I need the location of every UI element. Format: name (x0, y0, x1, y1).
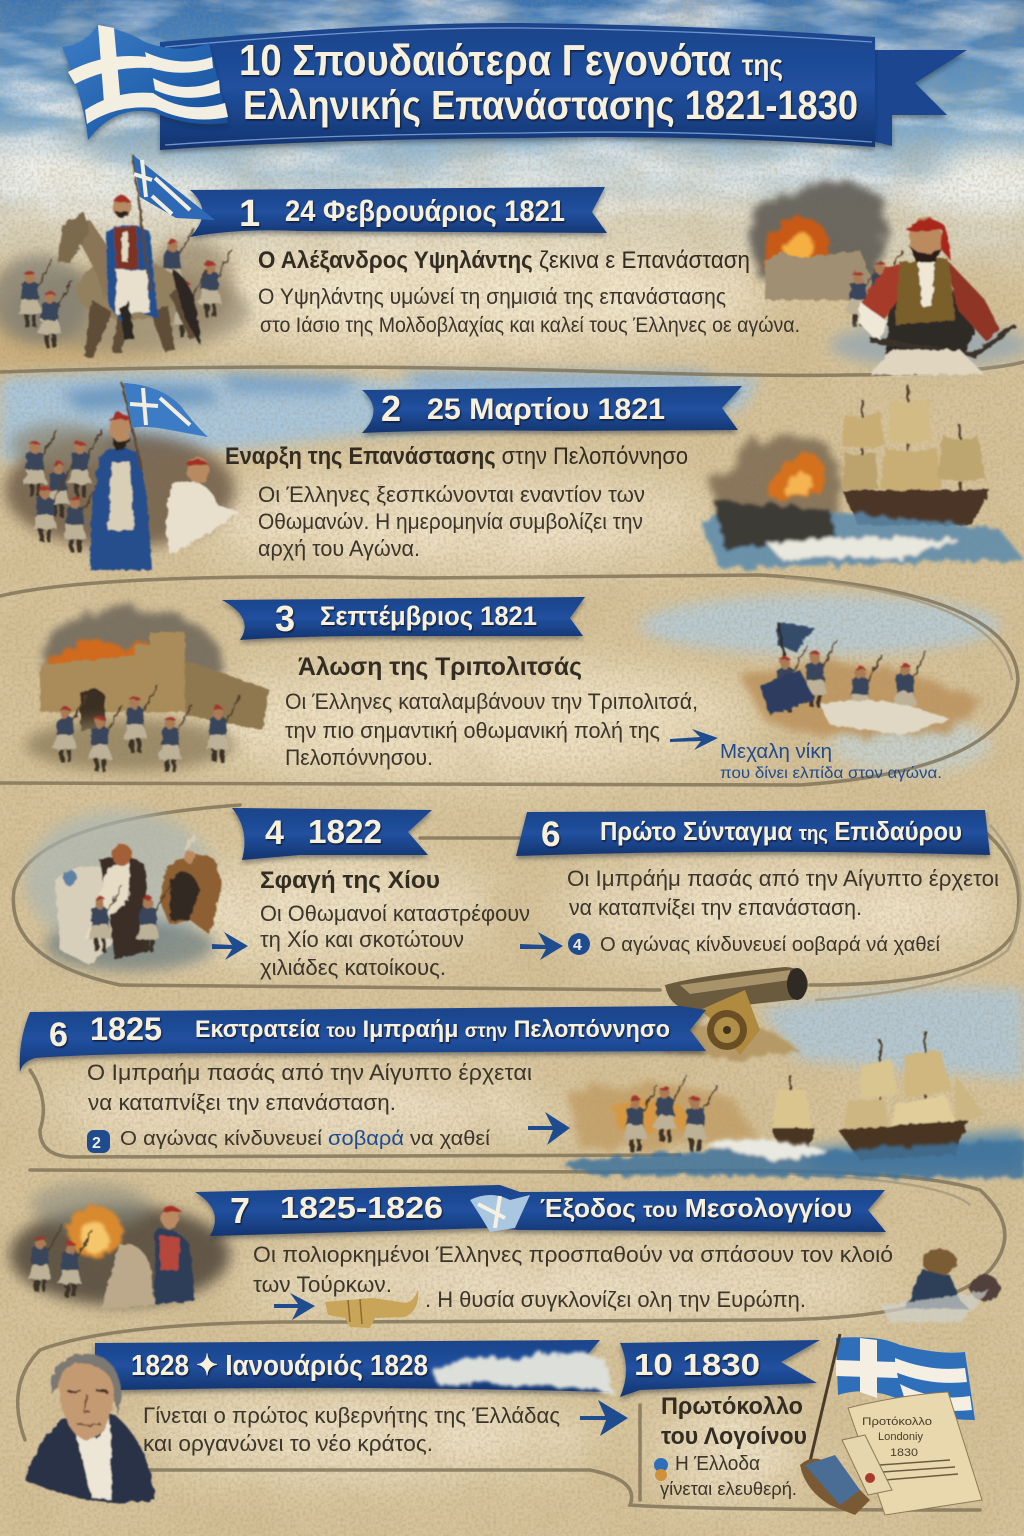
heading (661, 1393, 807, 1450)
icon: dagger hand (325, 1290, 418, 1328)
date label (265, 813, 382, 852)
body text: Οι Έλληνες ξεσπκώνονται εναντίον των (258, 482, 645, 507)
icon: badge: 2 (92, 1135, 101, 1152)
icon: badge (87, 1130, 110, 1153)
note: Η Έλλοδα (675, 1453, 760, 1475)
body text: των Τούρκων. (253, 1272, 392, 1297)
date label: 24 Φεβρουάριος 1821 (285, 195, 565, 228)
note: Ο αγώνας κίνδυνευεί οοβαρά νά χαθεί (600, 934, 941, 956)
title label (541, 815, 962, 854)
icon: small flag (470, 1195, 530, 1232)
body text: Οι Οθωμανοί καταστρέφουν (260, 901, 530, 926)
panel: event 1 (0, 155, 1024, 375)
body text: Οι Έλληνες καταλαμβάνουν την Τριπολιτσά, (285, 689, 698, 714)
body text (143, 1403, 560, 1456)
date ribbon (362, 386, 742, 433)
heading: Ο Αλέξανδρος Υψηλάντης ζεκινα ε Επανάσταση (258, 247, 750, 274)
title ribbon (516, 810, 990, 856)
date label: Σεπτέμβριος 1821 (320, 601, 537, 631)
callout: great victory (720, 741, 942, 782)
illustration: naval battle (560, 1030, 1024, 1178)
icon: flag on pole (133, 155, 215, 220)
icon: small emblem (654, 1458, 668, 1481)
date label (239, 193, 565, 235)
date and title label (49, 1011, 670, 1054)
icon: badge (568, 933, 590, 955)
date and title label: 6 (49, 1016, 68, 1054)
note: . Η θυσία συγκλονίζει ολη την Ευρώπη. (425, 1287, 806, 1312)
icon: greek flag (62, 25, 228, 140)
arrow (528, 1112, 570, 1145)
icon: banner tail (868, 50, 967, 146)
date label: 1 (239, 193, 260, 235)
date and title label: Έξοδος του Μεσολογγίου (540, 1193, 852, 1223)
body text: στο Ιάσιο της Μολδοβλαχίας και καλεί τους Έλληνες οε αγώνα. (260, 314, 800, 337)
heading: Εναρξη της Επανάστασης στην Πελοπόννησο (225, 443, 688, 470)
illustration: cannon (650, 967, 808, 1060)
panel: event 3 (25, 597, 985, 782)
body text: χιλιάδες κατοίκους. (260, 955, 446, 980)
illustration: seated fighter (880, 1249, 1000, 1322)
illustration: warriors with flag (5, 383, 240, 570)
note (660, 1453, 797, 1499)
body text (260, 901, 530, 980)
body text (253, 1242, 893, 1297)
body text (567, 866, 999, 920)
date ribbon (620, 1340, 820, 1397)
note: γίνεται ελευθερή. (660, 1479, 797, 1499)
arrow (580, 1400, 628, 1436)
date label: 10 1830 (634, 1347, 760, 1382)
body text: να καταπνίξει την επανάσταση. (569, 895, 862, 920)
date and title label: 7 (230, 1190, 250, 1231)
date ribbon (195, 1185, 886, 1236)
heading: Πρωτόκολλο (661, 1393, 803, 1420)
date label: 25 Μαρτίου 1821 (427, 393, 665, 426)
portrait: Ioannis Kapodistrias (25, 1354, 155, 1502)
date label: 3 (275, 598, 295, 639)
panel: event 5 (first constitution) (516, 810, 999, 960)
panel: event 2 (5, 383, 1024, 570)
scroll frame lines (0, 362, 1024, 1510)
body text: Γίνεται ο πρώτος κυβερνήτης της Έλλάδας (143, 1403, 560, 1428)
illustration: besieged fighters at Mesolongi (10, 1183, 230, 1310)
date ribbon (222, 597, 585, 640)
date label: 1822 (308, 813, 382, 850)
illustration: massacre of Chios (25, 810, 222, 971)
illustration: battle with banner (740, 622, 985, 736)
panel: event 7 (10, 1183, 1000, 1328)
illustration: burning fortress and fighter (745, 182, 1024, 375)
body text (258, 284, 800, 337)
arrow (520, 932, 563, 960)
date label: 4 (265, 814, 284, 852)
heading: Σφαγή της Χίου (260, 867, 440, 894)
banner body (160, 23, 875, 150)
second sky band (0, 371, 1024, 1170)
body text: αρχή του Αγώνα. (258, 536, 420, 561)
title text: 10 Σπουδαιότερα Γεγονότα της (239, 36, 783, 85)
date and title label: 1825-1826 (280, 1190, 443, 1225)
body text: τη Χίο και σκοτώτουν (260, 927, 464, 952)
body text: Οι Ιμπράήμ πασάς από την Αίγυπτο έρχετοι (567, 866, 999, 891)
body text: Ο Ιμπραήμ πασάς από την Αίγυπτο έρχεται (87, 1060, 532, 1085)
icon: protocol documents: Προτόκολλο (862, 1416, 932, 1428)
arrow (670, 729, 718, 750)
heading: του Λογοίνου (661, 1423, 807, 1450)
title banner (62, 23, 967, 150)
icon: clouds on ribbon (432, 1353, 612, 1392)
date ribbon (95, 1340, 610, 1392)
body text (258, 482, 645, 561)
icon: protocol documents: Londoniy (878, 1431, 923, 1443)
body text: την πιο σημαντική οθωμανική πολή της (285, 718, 660, 743)
date ribbon (232, 808, 432, 860)
body text: Πελοπόννησου. (285, 745, 433, 770)
icon: flag (124, 383, 208, 437)
illustration: rider with cavalry (0, 155, 250, 358)
body text: Οθωμανών. Η ημερομηνία συμβολίζει την (258, 509, 643, 534)
date label: 2 (381, 388, 401, 429)
note: Ο αγώνας κίνδυνευεί σοβαρά να χαθεί (120, 1128, 491, 1150)
date ribbon (190, 187, 607, 237)
date label (381, 388, 665, 429)
title text: Ελληνικής Επανάστασης 1821-1830 (243, 82, 858, 128)
panel: event 8 (Kapodistrias) (25, 1340, 628, 1502)
body text: να καταπνίξει την επανάσταση. (88, 1090, 396, 1115)
body text: Οι πολιορκημένοι Έλληνες προσπαθούν να σπάσουν τον κλοιό (253, 1242, 893, 1267)
callout: great victory: Μεχαλη νίκη (720, 741, 832, 763)
icon: protocol documents: 1830 (890, 1447, 918, 1459)
icon: flag with pole (808, 1334, 975, 1470)
title label: 6 (541, 815, 560, 854)
date label (275, 598, 537, 639)
icon: protocol documents (800, 1392, 982, 1515)
date and title label: 1825 (90, 1011, 162, 1047)
panel: event 4 (25, 808, 530, 980)
icon: badge: 4 (573, 937, 582, 954)
title text (239, 36, 858, 128)
callout: great victory: που δίνει ελπίδα στον αγώνα. (720, 765, 942, 782)
body text: Ο Υψηλάντης υμώνεί τη σημισιά της επανάστασης (258, 284, 726, 309)
arrow (212, 932, 248, 960)
illustration: burning port with ships (700, 385, 1024, 568)
arrow (274, 1293, 315, 1320)
panel: event 10 (London Protocol) (620, 1334, 982, 1515)
date and title label (230, 1190, 852, 1231)
date label: 1828 ✦ Ιανουάριός 1828 (131, 1350, 428, 1382)
panel: event 6 (Ibrahim campaign) (20, 1006, 1024, 1178)
title label: Πρώτο Σύνταγμα της Επιδαύρου (600, 816, 962, 846)
body text (87, 1060, 532, 1115)
heading: Άλωση της Τριπολιτσάς (298, 653, 582, 681)
body text: και οργανώνει το νέο κράτος. (143, 1431, 433, 1456)
illustration: burning fortress of Tripolitsa (25, 608, 270, 772)
date ribbon (20, 1006, 706, 1072)
body text (285, 689, 698, 770)
date and title label: Εκστρατεία του Ιμπραήμ στην Πελοπόννησο (195, 1016, 670, 1043)
